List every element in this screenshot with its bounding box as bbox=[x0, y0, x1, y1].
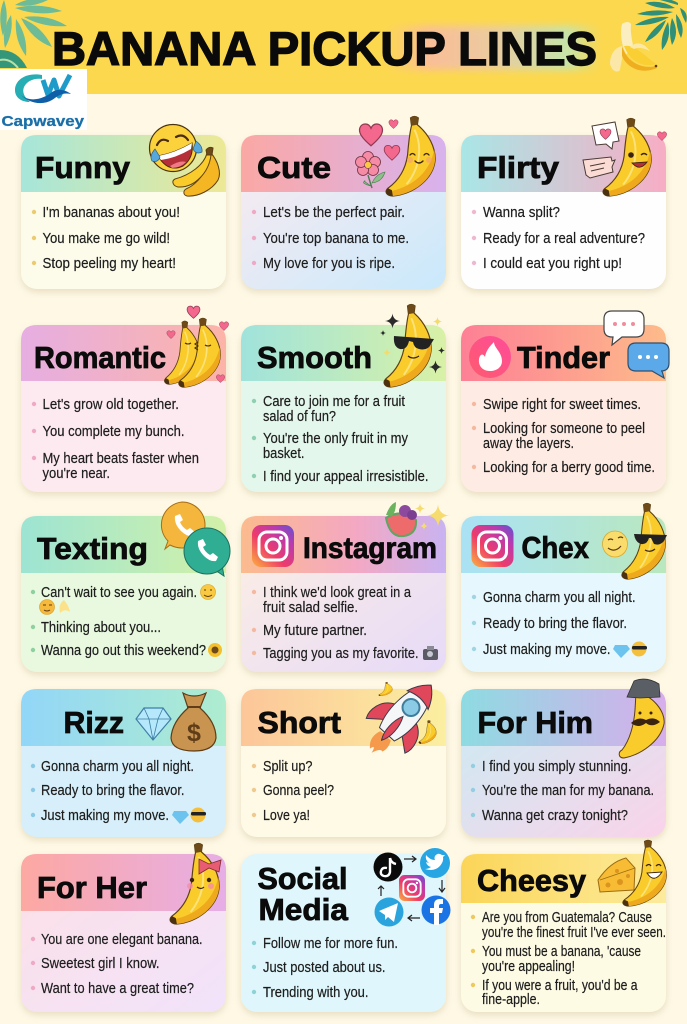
lines: Trending with you. bbox=[263, 984, 368, 1001]
lines: You're the only fruit in my bbox=[263, 430, 408, 447]
panel: For Him bbox=[461, 679, 666, 837]
lines: Looking for a berry good time. bbox=[483, 459, 655, 476]
lines bbox=[252, 204, 409, 272]
panel: Tinder bbox=[461, 311, 669, 492]
lines: Just making my move. bbox=[41, 807, 169, 824]
lines: I find you simply stunning. bbox=[482, 758, 632, 775]
icon: Instagram bbox=[399, 875, 425, 901]
lines: I think we'd look great in a bbox=[263, 584, 412, 601]
logo: Capwavey bbox=[0, 69, 87, 130]
lines: away the layers. bbox=[483, 435, 574, 452]
icon: cool banana with sunglasses bbox=[380, 305, 445, 387]
lines bbox=[31, 584, 206, 659]
lines: Love ya! bbox=[263, 807, 310, 824]
heading: Cute bbox=[257, 150, 331, 185]
icon: camera bbox=[423, 646, 438, 660]
icon: smiling banana bbox=[386, 116, 435, 196]
icon: kissing bananas bbox=[165, 306, 229, 387]
icon: orange call bubble bbox=[161, 502, 205, 549]
logo wordmark: Capwavey bbox=[2, 113, 85, 130]
lines: Wanna split? bbox=[483, 204, 560, 221]
panel: Romantic bbox=[21, 306, 229, 492]
heading: Romantic bbox=[34, 340, 166, 375]
lines bbox=[32, 396, 199, 482]
lines bbox=[472, 589, 636, 658]
heading: Tinder bbox=[517, 340, 610, 375]
title: BANANA PICKUP LINES bbox=[52, 22, 597, 75]
lines: Let's be the perfect pair. bbox=[263, 204, 405, 221]
icon: Telegram bbox=[374, 898, 404, 926]
panel: Smooth bbox=[241, 305, 446, 492]
icons: gem and cool emoji bbox=[172, 808, 206, 824]
lines: Gonna charm you all night. bbox=[41, 758, 194, 775]
heading: Flirty bbox=[477, 150, 560, 185]
icon: Twitter bbox=[420, 848, 450, 878]
lines: You complete my bunch. bbox=[42, 423, 184, 440]
panel: Chex bbox=[461, 503, 667, 672]
lines: Wanna go out this weekend? bbox=[41, 642, 206, 659]
icon: TikTok bbox=[374, 852, 402, 882]
lines: Let's grow old together. bbox=[42, 396, 179, 413]
lines: I find your appeal irresistible. bbox=[263, 468, 428, 485]
lines: My heart beats faster when bbox=[42, 450, 199, 467]
lines bbox=[252, 584, 418, 662]
panel: For Her bbox=[21, 843, 226, 1012]
lines: My future partner. bbox=[263, 622, 367, 639]
lines: Wanna get crazy tonight? bbox=[482, 807, 628, 824]
panel: Social Media bbox=[241, 848, 450, 1012]
lines: you're near. bbox=[42, 465, 110, 482]
lines: Follow me for more fun. bbox=[263, 935, 398, 952]
lines bbox=[471, 758, 654, 824]
lines: you're appealing! bbox=[482, 959, 575, 975]
icons: gem and cool emoji bbox=[613, 642, 647, 658]
heading: Short bbox=[258, 705, 341, 740]
lines bbox=[472, 396, 655, 476]
lines: Ready for a real adventure? bbox=[483, 230, 645, 247]
lines: basket. bbox=[263, 445, 304, 462]
lines bbox=[252, 758, 334, 824]
lines: Thinking about you... bbox=[41, 619, 161, 636]
lines bbox=[31, 931, 202, 997]
icon: green call bubble bbox=[184, 528, 230, 576]
lines bbox=[472, 204, 645, 272]
heading: Social bbox=[258, 861, 348, 896]
lines: You are one elegant banana. bbox=[41, 931, 202, 948]
panel: Cute bbox=[241, 116, 446, 289]
logo mark bbox=[15, 74, 71, 103]
logo: Tinder flame bbox=[469, 336, 511, 378]
icon: peeled banana bbox=[610, 22, 657, 72]
icon: chat bubbles bbox=[583, 122, 619, 178]
lines bbox=[252, 935, 398, 1001]
lines bbox=[471, 910, 666, 1008]
panel: Rizz bbox=[21, 689, 226, 837]
icon: banana with sunglasses bbox=[622, 503, 667, 579]
icon: money bag bbox=[171, 693, 216, 751]
lines bbox=[252, 393, 428, 485]
heading: Smooth bbox=[257, 340, 372, 375]
icon: fruit salad and sparkles bbox=[386, 502, 449, 536]
panel: Short bbox=[241, 667, 452, 837]
lines: Care to join me for a fruit bbox=[263, 393, 406, 410]
icon: banana with bow bbox=[170, 843, 221, 924]
lines: fine-apple. bbox=[482, 992, 540, 1008]
icon: laughing banana bbox=[623, 840, 666, 906]
heading: Funny bbox=[35, 150, 131, 185]
lines: Split up? bbox=[263, 758, 312, 775]
icon: banana with hat and moustache bbox=[619, 679, 664, 758]
lines: You're top banana to me. bbox=[263, 230, 409, 247]
icon: laughing emoji bbox=[150, 124, 202, 172]
icons: small emoji bbox=[40, 584, 222, 657]
icon: banana bunch bbox=[173, 147, 219, 196]
lines bbox=[32, 204, 180, 272]
lines: My love for you is ripe. bbox=[263, 255, 395, 272]
title highlight bbox=[385, 26, 600, 70]
heading bbox=[258, 861, 349, 927]
logo: Instagram bbox=[252, 525, 294, 567]
panel: Instagram bbox=[241, 502, 449, 672]
icon: smirking emoji bbox=[602, 531, 628, 557]
lines: You're the man for my banana. bbox=[482, 782, 654, 799]
heading: For Her bbox=[37, 870, 147, 905]
palm leaves: top right bbox=[635, 0, 687, 50]
panel: Cheesy bbox=[461, 840, 666, 1012]
icon: hearts and flower bbox=[356, 120, 400, 188]
panel: Flirty bbox=[461, 118, 667, 289]
lines: Just making my move. bbox=[483, 641, 610, 658]
heading: Instagram bbox=[303, 532, 437, 565]
lines: Want to have a great time? bbox=[41, 980, 194, 997]
heading: Cheesy bbox=[477, 863, 587, 898]
lines: Gonna charm you all night. bbox=[483, 589, 636, 606]
lines: You make me go wild! bbox=[42, 230, 170, 247]
lines: salad of fun? bbox=[263, 408, 336, 425]
heading: Chex bbox=[522, 530, 590, 565]
lines: fruit salad selfie. bbox=[263, 599, 358, 616]
lines: I could eat you right up! bbox=[483, 255, 622, 272]
icon: diamond bbox=[136, 708, 171, 740]
logo: Instagram bbox=[472, 525, 514, 567]
panel: Texting bbox=[21, 502, 230, 672]
lines: Tagging you as my favorite. bbox=[263, 645, 418, 662]
lines bbox=[31, 758, 194, 824]
lines: Ready to bring the flavor. bbox=[483, 615, 627, 632]
lines: I'm bananas about you! bbox=[42, 204, 180, 221]
icon: money bag: $ bbox=[187, 719, 201, 747]
lines: Gonna peel? bbox=[263, 782, 334, 799]
lines: Sweetest girl I know. bbox=[41, 955, 160, 972]
icon: cheese bbox=[598, 858, 635, 892]
icon: Facebook bbox=[422, 896, 450, 925]
bottom dark frond bbox=[0, 50, 27, 68]
icon: chat bubbles bbox=[604, 311, 669, 378]
arrows between networks bbox=[378, 856, 445, 921]
heading: Media bbox=[258, 892, 349, 927]
lines: If you were a fruit, you'd be a bbox=[482, 978, 638, 994]
lines: Just posted about us. bbox=[263, 959, 386, 976]
small bananas bbox=[379, 682, 436, 744]
lines: Looking for someone to peel bbox=[483, 420, 645, 437]
heading: For Him bbox=[478, 705, 593, 740]
heading: Texting bbox=[37, 531, 148, 566]
lines: Stop peeling my heart! bbox=[42, 255, 176, 272]
icon: rocket bbox=[350, 667, 452, 771]
lines: You must be a banana, 'cause bbox=[482, 944, 641, 960]
lines: Can't wait to see you again. bbox=[41, 584, 197, 601]
icon: winking banana bbox=[603, 118, 667, 196]
palm leaves: top left bbox=[0, 0, 67, 68]
panel: Funny bbox=[21, 124, 226, 289]
lines: Swipe right for sweet times. bbox=[483, 396, 641, 413]
header band bbox=[0, 0, 687, 94]
lines: Ready to bring the flavor. bbox=[41, 782, 184, 799]
heading: Rizz bbox=[64, 705, 124, 740]
